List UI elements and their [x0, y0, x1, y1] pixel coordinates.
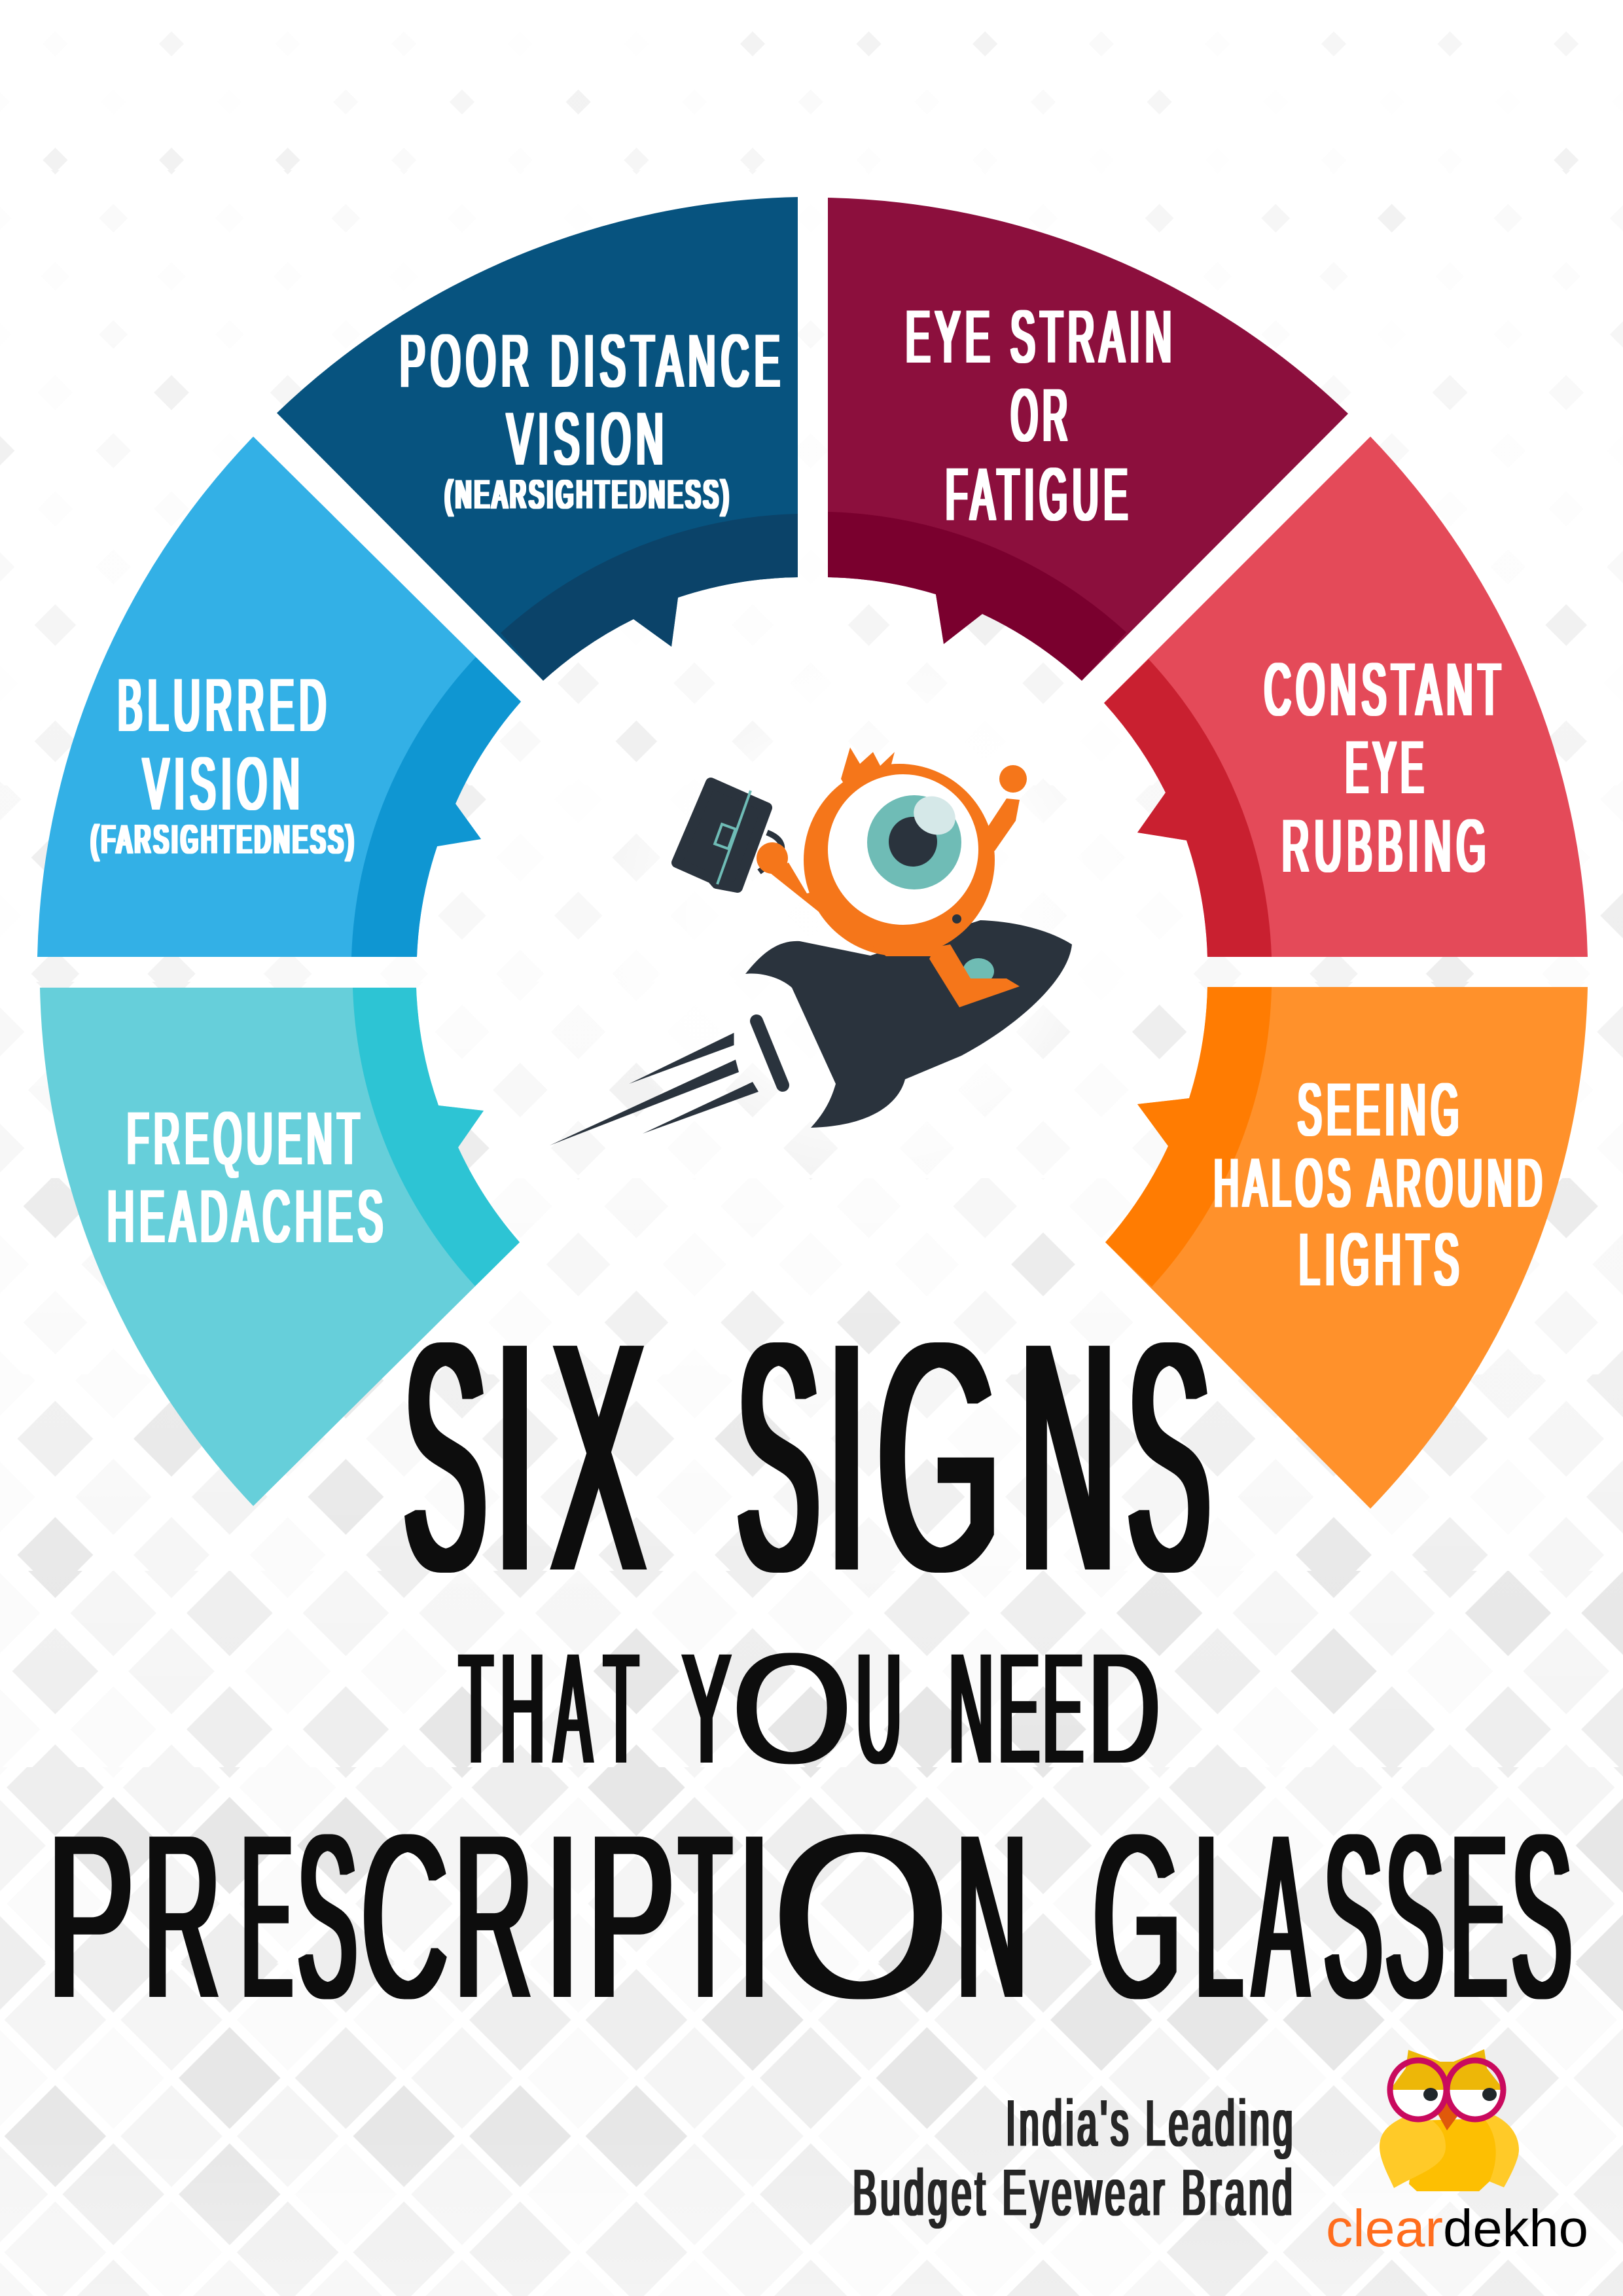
title: six signs: S	[737, 1276, 819, 1639]
label: constant eye rubbing	[1264, 649, 1506, 887]
label: blurred vision: VISION	[143, 742, 305, 825]
label: seeing halos around lights: SEEING	[1298, 1068, 1464, 1151]
title: prescription glasses: C	[361, 1787, 448, 2047]
title: six signs: I	[828, 1276, 865, 1639]
title: six signs: N	[1020, 1276, 1116, 1639]
title: prescription glasses: L	[1195, 1787, 1242, 2047]
logo: cleardekho owl	[1326, 2049, 1588, 2257]
title: that you need: E	[1043, 1621, 1083, 1796]
tagline: india's leading budget eyewear brand: India's Leading	[1006, 2087, 1296, 2159]
label: seeing halos around lights: HALOS AROUND	[1214, 1146, 1547, 1221]
label: eye strain or fatigue: EYE STRAIN	[906, 296, 1177, 378]
title: prescription glasses: S	[1385, 1787, 1444, 2047]
title: that you need: T	[459, 1621, 493, 1796]
title: that you need: D	[1088, 1621, 1160, 1796]
label: constant eye rubbing: RUBBING	[1282, 805, 1491, 887]
title: prescription glasses: E	[1451, 1787, 1507, 2047]
title: prescription glasses: E	[241, 1787, 293, 2047]
panel: seeing halos around lights	[1105, 987, 1588, 1509]
title: that you need: N	[949, 1621, 993, 1796]
title: six signs: X	[552, 1276, 645, 1639]
rocket body	[745, 920, 1072, 1128]
text: S	[1128, 1276, 1210, 1639]
title: that you need: O	[732, 1621, 851, 1796]
title: prescription glasses: G	[1093, 1787, 1182, 2047]
label: poor distance vision: VISION	[507, 397, 669, 480]
tagline: india's leading budget eyewear brand	[853, 2087, 1296, 2229]
title: prescription glasses: T	[679, 1787, 732, 2047]
eyeball	[828, 774, 978, 925]
title: prescription glasses: O	[772, 1787, 950, 2047]
panel: constant eye rubbing	[1104, 437, 1588, 957]
title: prescription glasses: R	[144, 1787, 220, 2047]
owl wings and body	[1486, 2115, 1519, 2187]
label: eye strain or fatigue: OR	[1011, 374, 1073, 456]
title: prescription glasses: S	[298, 1787, 357, 2047]
title: six signs: I	[494, 1276, 536, 1639]
panel: eye strain or fatigue	[828, 198, 1348, 681]
owl glasses	[1390, 2060, 1503, 2119]
title: six signs: G	[877, 1276, 1001, 1639]
label: poor distance vision: (NEARSIGHTEDNESS)	[445, 473, 732, 517]
label: seeing halos around lights	[1214, 1068, 1547, 1300]
mascot: eyeball riding a rocket	[550, 747, 1072, 1145]
title: that you need: A	[554, 1621, 592, 1796]
title: that you need: H	[500, 1621, 544, 1796]
briefcase	[677, 783, 782, 888]
label: frequent headaches	[107, 1097, 388, 1257]
title: prescription glasses: I	[740, 1787, 769, 2047]
title: prescription glasses: S	[1324, 1787, 1382, 2047]
label: blurred vision	[91, 664, 357, 862]
label: blurred vision: BLURRED	[118, 664, 331, 746]
label: eye strain or fatigue: FATIGUE	[946, 453, 1133, 535]
owl head	[1390, 2049, 1504, 2090]
label: frequent headaches: FREQUENT	[127, 1097, 365, 1179]
rocket window	[963, 958, 994, 984]
owl beak	[1438, 2099, 1458, 2130]
title: prescription glasses: I	[546, 1787, 578, 2047]
title: prescription glasses: A	[1253, 1787, 1308, 2047]
logo wordmark: dekho	[1443, 2199, 1588, 2257]
title: prescription glasses: R	[455, 1787, 533, 2047]
title: that you need: T	[604, 1621, 637, 1796]
label: seeing halos around lights: LIGHTS	[1299, 1219, 1464, 1300]
tagline: india's leading budget eyewear brand: Budget Eyewear Brand	[853, 2156, 1296, 2229]
logo wordmark: clear	[1326, 2199, 1443, 2257]
title: that you need: U	[856, 1621, 902, 1796]
title: that you need: Y	[682, 1621, 731, 1796]
title: prescription glasses: N	[957, 1787, 1027, 2047]
label: poor distance vision: POOR DISTANCE	[400, 319, 785, 402]
label: eye strain or fatigue	[906, 296, 1177, 535]
title: prescription glasses: P	[48, 1787, 134, 2047]
rocket exhaust streaks	[550, 1021, 783, 1145]
label: constant eye rubbing: EYE	[1346, 727, 1429, 808]
orange body, arms, leg and hair	[757, 747, 1027, 1007]
title: that you need: E	[999, 1621, 1039, 1796]
owl eyes	[1390, 2090, 1504, 2119]
label: frequent headaches: HEADACHES	[107, 1175, 388, 1257]
label: constant eye rubbing: CONSTANT	[1264, 649, 1506, 730]
title: prescription glasses: P	[588, 1787, 675, 2047]
panel: blurred vision	[37, 437, 521, 957]
label: poor distance vision	[400, 319, 785, 517]
label: blurred vision: (FARSIGHTEDNESS)	[91, 818, 357, 862]
panel: frequent headaches	[40, 988, 520, 1506]
panel: poor distance vision	[277, 197, 798, 681]
title: six signs: S	[404, 1276, 486, 1639]
